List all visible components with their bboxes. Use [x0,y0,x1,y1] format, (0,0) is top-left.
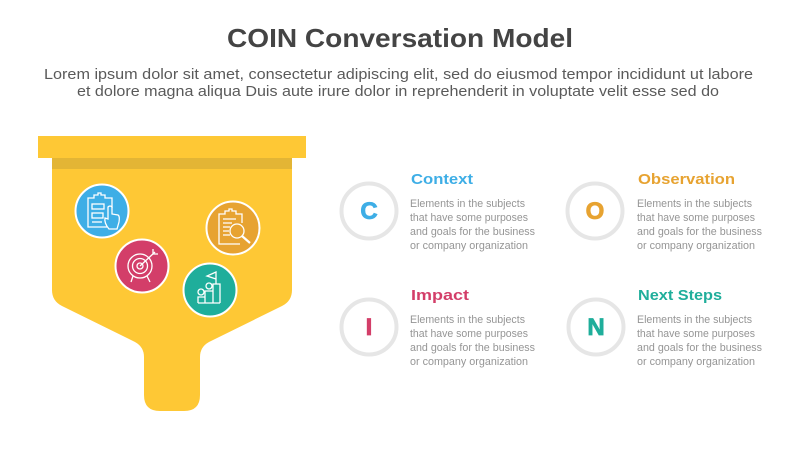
subtitle [44,66,753,100]
description: or company organization [637,240,755,252]
description: that have some purposes [410,212,528,224]
funnel lid [38,136,306,158]
heading: Observation [638,171,735,188]
description [410,314,535,368]
description: that have some purposes [637,212,755,224]
description: that have some purposes [410,328,528,340]
item: Next Steps [568,287,762,368]
description: and goals for the business [410,342,535,354]
subtitle: et dolore magna aliqua Duis aute irure dolor in reprehenderit in voluptate velit esse sed do [77,83,719,100]
description: or company organization [410,240,528,252]
icon: clipboard with hand [76,184,128,238]
badge C: C [360,198,378,225]
badge I: I [366,314,372,341]
icon: clipboard with magnifier [206,202,260,254]
description: or company organization [637,356,755,368]
item: Context [342,171,535,252]
funnel body [52,158,292,411]
badge I [342,300,396,354]
title: COIN Conversation Model [227,23,573,53]
badge N [568,300,624,354]
badge C [342,184,396,238]
badge O [568,184,622,238]
funnel shadow band [52,158,292,169]
description: and goals for the business [637,342,762,354]
description: Elements in the subjects [410,314,525,326]
description [637,314,762,368]
icon: target with arrow [116,240,168,292]
description: or company organization [410,356,528,368]
heading: Next Steps [638,287,722,304]
description: Elements in the subjects [410,198,525,210]
item: Observation [568,171,762,252]
description: Elements in the subjects [637,314,752,326]
heading: Context [411,171,473,188]
badge N: N [587,314,605,341]
description: that have some purposes [637,328,755,340]
heading: Impact [411,287,469,304]
description: and goals for the business [637,226,762,238]
description: Elements in the subjects [637,198,752,210]
item: Impact [342,287,535,368]
funnel [38,136,306,411]
badge O: O [586,198,604,225]
subtitle: Lorem ipsum dolor sit amet, consectetur adipiscing elit, sed do eiusmod tempor incididunt ut labore [44,66,753,83]
description [637,198,762,252]
description: and goals for the business [410,226,535,238]
description [410,198,535,252]
icon: steps with flag [184,264,236,316]
